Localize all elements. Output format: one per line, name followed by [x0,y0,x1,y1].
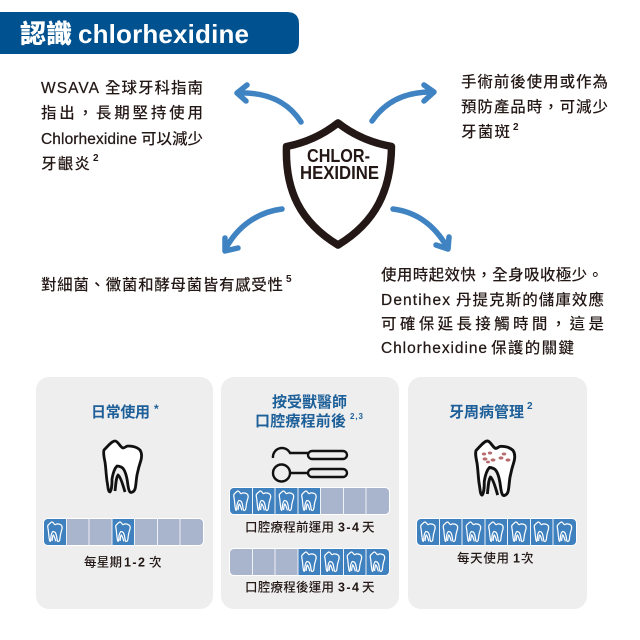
label: once daily [457,550,534,566]
label: after procedure [245,580,375,594]
arrow: top right [372,85,434,121]
heading: daily use: 日常使用 [91,403,150,421]
heading: veterinary dental procedures: 按受獸醫師 [272,393,347,411]
label: one to two times weekly [84,554,162,570]
icon: dental instruments [273,448,347,482]
label: once daily: 1 [513,552,520,566]
frequency bar: one to two times weekly [43,518,204,546]
label: after procedure: 天 [362,580,375,594]
text block: WSAVA guideline: 牙齦炎 [41,155,90,173]
heading: veterinary dental procedures: 口腔療程前後 [255,412,346,430]
text block: susceptibility: 對細菌、黴菌和酵母菌皆有感受性 [41,275,283,294]
label: before procedure [245,520,375,534]
text block: pre and post surgery: 2 [513,122,519,133]
title banner: 認識 [20,19,72,49]
title banner: chlorhexidine [78,19,249,49]
text block: pre and post surgery: 手術前後使用或作為 [461,73,608,91]
label: once daily: 每天使用 [457,550,509,566]
shield icon: HEXIDINE [300,163,379,183]
text block: WSAVA guideline: 全球牙科指南 [105,79,203,97]
arrow: bottom right [393,209,449,249]
text block: WSAVA guideline: 可以減少 [141,130,203,148]
text block: WSAVA guideline: WSAVA [41,80,100,97]
shield icon: CHLOR- [307,146,370,166]
heading: veterinary dental procedures: 2,3 [350,412,364,421]
text block: fast action: Dentihex [381,292,450,309]
panel: before and after dental procedures [221,377,399,609]
label: before procedure: 3-4 [338,520,359,534]
heading: periodontal management: 2 [527,401,533,412]
text block: susceptibility: 5 [286,274,292,285]
icon: tooth with plaque [476,441,515,495]
icon: tooth [104,441,142,492]
text block: fast action: 保護的關鍵 [491,339,574,357]
label: one to two times weekly: 次 [149,554,162,570]
panel: daily use [36,377,213,609]
text block: fast action: 可確保延長接觸時間，這是 [381,314,604,333]
heading: veterinary dental procedures [255,393,364,430]
text block: WSAVA guideline [41,79,203,173]
text block: pre and post surgery: 預防產品時，可減少 [461,98,608,116]
heading: periodontal management: 牙周病管理 [449,403,524,421]
label: before procedure: 口腔療程前運用 [245,520,334,534]
heading: daily use: * [154,402,159,416]
label: after procedure: 3-4 [338,580,359,594]
text block: WSAVA guideline: 2 [93,153,99,164]
frequency bar: once daily [416,518,577,546]
arrow: top left [237,85,301,122]
text block: WSAVA guideline: 指出，長期堅持使用 [41,104,203,122]
arrow: bottom left [225,209,282,251]
frequency bar: after procedure [229,548,390,576]
label: one to two times weekly: 每星期 [84,554,122,570]
text block: pre and post surgery: 牙菌斑 [461,123,510,141]
text block: pre and post surgery [461,73,608,141]
label: after procedure: 口腔療程後運用 [245,580,334,594]
text block: fast action: 使用時起效快，全身吸收極少。 [381,266,603,284]
label: once daily: 次 [521,550,534,566]
text block: fast action: Chlorhexidine [381,340,487,357]
text block: fast action: 丹提克斯的儲庫效應 [456,290,604,309]
label: before procedure: 天 [362,520,375,534]
frequency bar: before procedure [229,487,390,515]
shield icon [286,123,392,245]
panel: periodontal disease management [408,377,587,609]
title banner [0,12,299,54]
text block: WSAVA guideline: Chlorhexidine [41,131,137,148]
text block: fast action [381,266,604,357]
label: one to two times weekly: 1-2 [124,556,145,570]
